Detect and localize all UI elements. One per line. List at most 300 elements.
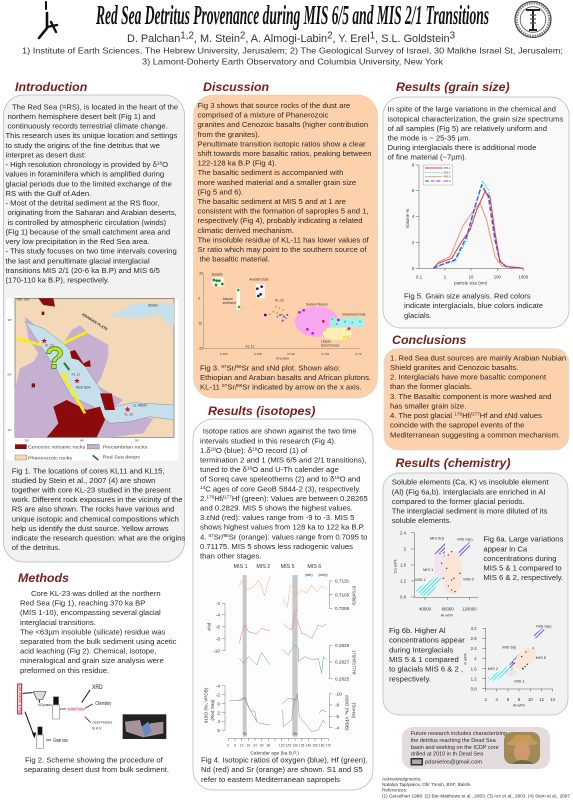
- caption: figure 1: of the detritus.: [12, 543, 60, 552]
- chart: figure 4 isotope records vs age: 0.7105: [335, 592, 350, 597]
- chart: figure 4 isotope records vs age: Calendar age (ka B.P.): [250, 750, 299, 756]
- chart: figure 3 Sr-Nd scatter plot: 0.72: [356, 352, 362, 356]
- caption: figure 6a: concentrations during: [483, 554, 557, 563]
- chart: figure 5 grain size distribution: 6: [412, 188, 415, 193]
- text: discussion body: shift towards more basaltic ratios, peaking between: [198, 149, 372, 158]
- chart: figure 5 grain size distribution: 1: [444, 274, 447, 279]
- chart: figure 6a Ca vs Al: 2: [404, 547, 407, 552]
- chart: figure 5 grain size distribution: 8: [412, 163, 415, 168]
- chart: figure 6b K vs Al: K wt%: [462, 653, 467, 665]
- map: Red Sea region geology: 10°: [7, 428, 13, 432]
- text: conclusions list: [390, 353, 566, 439]
- chart: figure 3 Sr-Nd scatter plot: 0.712: [287, 352, 295, 356]
- chart: figure 5 grain size distribution: 2: [412, 240, 415, 245]
- text: isotopes body: and 0.2829. MIS 5 shows the highest values.: [200, 504, 353, 512]
- chart: figure 4 isotope records vs age: 36: [266, 744, 270, 748]
- map legend: Cenozoic volcanic rocks: [28, 445, 86, 451]
- chart: figure 5 grain size distribution: 0: [412, 266, 415, 271]
- chart: figure 4 isotope records vs age: 135: [299, 744, 305, 748]
- chart: figure 6b K vs Al: [389, 624, 556, 707]
- text: isotopes body: 18: [334, 475, 340, 480]
- caption: figure 1: indicate the research question: what are the origins: [12, 534, 185, 542]
- map: Red Sea region geology: RED SEA: [76, 385, 91, 389]
- text: acknowledgments and references: [382, 776, 570, 799]
- authors: D. Palchan: [127, 33, 180, 45]
- text: methods body: Core KL-23 was drilled at the northern: [31, 589, 161, 598]
- text: isotopes body: 14: [200, 485, 206, 490]
- caption: figure 3: KL-11: [200, 382, 220, 392]
- map legend: Phanerozoic rocks: [28, 455, 73, 461]
- text: discussion body: 122-128 ka B.P (Fig 4).: [198, 159, 277, 168]
- chart: figure 4 isotope records vs age: 87Sr/86Sr: [352, 586, 357, 606]
- chart: figure 4 isotope records vs age: 140: [306, 744, 311, 748]
- chart: figure 6b K vs Al: 4: [495, 697, 498, 702]
- text: isotopes body: Hf (green): Values are between 0.28265: [232, 494, 368, 503]
- chart: figure 4 isotope records vs age: 30: [260, 744, 264, 748]
- text: isotopes body: 87: [209, 533, 214, 538]
- chart: figure 6a Ca vs Al: [392, 530, 564, 617]
- map: Red Sea region geology: 40°: [80, 438, 85, 442]
- text: isotopes body: tuned to the δ: [200, 465, 247, 474]
- text: discussion body: comprised of a mixture of Phanerozoic: [198, 111, 329, 120]
- text: conclusions list: 2. Interglacials have more basaltic component: [390, 372, 547, 382]
- chart: figure 6b K vs Al: 14: [550, 697, 556, 702]
- chart: figure 5 grain size distribution: particle size (nm): [454, 280, 488, 285]
- text: introduction body: (170-110 ka B.P), respectively.: [6, 276, 109, 285]
- affiliations: 1) Institute of Earth Sciences, The Hebrew University, Jerusalem; 2) The Geological Survey of Israel, 30 Malkhe Israel St, Jerusalem;: [22, 46, 563, 56]
- text: discussion body: The basaltic sediment is accompanied with: [198, 168, 343, 177]
- map legend: Precambrian rocks: [103, 445, 148, 451]
- text: isotopes body: of Soreq cave speleothems (2) and to δ: [200, 475, 334, 484]
- map legend: Red Sea deeps: [103, 455, 141, 461]
- chart legend: MIS 2: [444, 170, 451, 174]
- caption: figure 3: 87: [221, 364, 227, 369]
- caption: figure 5: [404, 292, 543, 320]
- panel: future research: [402, 727, 550, 769]
- text: isotopes body: C ages of core GeoB 5844-2 (3), respectively.: [205, 484, 361, 493]
- diagram: figure 2 procedure scheme: <63µm: [37, 703, 48, 707]
- text: isotopes body: Sr (orange): values range from 0.7095 to: [229, 532, 367, 541]
- chart: figure 3 Sr-Nd scatter plot: [198, 271, 365, 360]
- chart: figure 4 isotope records vs age: d18O (‰, VPDB): [344, 695, 349, 731]
- chart: figure 4 isotope records vs age: -10: [335, 691, 342, 696]
- text: acknowledgments and references: Acknowledgments:: [382, 776, 421, 782]
- chart: figure 6b K vs Al: Al wt%: [513, 702, 526, 707]
- text: introduction body: This research uses its unique location and settings: [6, 131, 178, 140]
- chart: figure 4 isotope records vs age: -10: [213, 648, 220, 653]
- text: methods body: separated from the bulk sediment using acetic: [20, 637, 177, 646]
- text: methods body: acid leaching (Fig 2). Chemical, isotope,: [20, 647, 156, 656]
- chart: figure 4 isotope records vs age: 130: [292, 744, 298, 748]
- text: isotopes body: 18: [252, 446, 258, 451]
- chart: figure 6a Ca vs Al: 80000: [442, 607, 454, 612]
- panel: grain size results: [383, 97, 569, 328]
- text: introduction body: (Fig 1) because of the small catchment area and: [6, 227, 170, 236]
- panel: chemistry results: [383, 473, 568, 715]
- affiliations: 3) Lamont-Doherty Earth Observatory and Columbia University, New York: [142, 57, 444, 67]
- chart: figure 6b K vs Al: 2.8: [471, 636, 477, 641]
- chart: figure 4 isotope records vs age: 2: [217, 710, 220, 715]
- chart: figure 6a Ca vs Al: Al wt%: [441, 612, 453, 617]
- chart: figure 5 grain size distribution: 100: [494, 274, 502, 279]
- panel: isotopes: [193, 419, 373, 790]
- chart: figure 6a Ca vs Al: 1.6: [400, 563, 407, 568]
- text: introduction body: RS with the Gulf of Aden.: [6, 189, 91, 198]
- map: Red Sea region geology: 500km: [148, 304, 159, 308]
- diagram: figure 2 procedure scheme: XRD: [92, 684, 103, 691]
- text: conclusions list: coincide with the sapropel events of the: [390, 421, 524, 430]
- chart: figure 3 Sr-Nd scatter plot: 0: [198, 296, 200, 300]
- text: introduction body: glacial periods due to the limited exchange of the: [6, 179, 172, 188]
- text: conclusions list: 3. The Basaltic component is more washed and: [390, 392, 551, 401]
- chart: figure 6a Ca vs Al: Ca wt%: [392, 559, 397, 573]
- text: introduction body: originating from the Saharan and Arabian deserts,: [8, 208, 177, 217]
- text: introduction body: values in foraminifera which is amplified during: [6, 170, 164, 179]
- text: grain size body: In spite of the large variations in the chemical and: [388, 105, 556, 114]
- chart: figure 3 Sr-Nd scatter plot: Sand Dunes: [321, 343, 340, 347]
- caption: figure 3: 86: [236, 364, 242, 369]
- chart: figure 4 isotope records vs age: -4: [216, 612, 220, 617]
- chart: figure 5 grain size distribution: [405, 163, 529, 285]
- chart: figure 6b K vs Al: 8: [518, 697, 521, 702]
- caption: figure 1: help us identify the dust source. Yellow arrows: [12, 524, 169, 533]
- text: discussion body: from the granites).: [198, 130, 260, 139]
- chart: figure 4 isotope records vs age: d18O (‰, VPDB): [203, 687, 208, 723]
- chart: figure 4 isotope records vs age: -4: [216, 683, 220, 688]
- chart: figure 4 isotope records vs age: 170: [326, 744, 331, 748]
- chart: figure 4 isotope records vs age: 125: [286, 744, 291, 748]
- caption: figure 1: work. Different rock exposures in the vicinity of the: [11, 495, 183, 504]
- map: Red Sea region geology: 30°: [7, 318, 13, 322]
- chart: figure 5 grain size distribution: 10: [469, 274, 474, 279]
- chart: figure 3 Sr-Nd scatter plot: KL-23: [275, 298, 284, 302]
- chart: figure 4 isotope records vs age: -2: [216, 601, 220, 606]
- chart: figure 6b K vs Al: 1.6: [471, 666, 477, 671]
- caption: figure 3: Sr/: [227, 382, 238, 392]
- chart: figure 6b K vs Al: MIS 1: [514, 679, 526, 684]
- text: introduction body: the last and penultimate glacial interglacial: [6, 256, 150, 265]
- caption: figure 5: Fig 5. Grain size analysis. Red colors: [404, 292, 531, 301]
- text: isotopes body: Isotope ratios are shown against the two time: [203, 427, 357, 436]
- text: conclusions list: has smaller grain size.: [390, 401, 466, 410]
- icon: envelope: [410, 758, 423, 766]
- chart: figure 5 grain size distribution: 4: [412, 214, 415, 219]
- map: Red Sea region geology: 30°: [25, 438, 30, 442]
- diagram: figure 2 procedure scheme: Grain size: [53, 738, 68, 744]
- text: isotopes body: Sr/: [214, 532, 224, 541]
- chart: figure 4 isotope records vs age: -6: [216, 624, 220, 629]
- photo: laboratory: [123, 714, 166, 739]
- chart: figure 5 grain size distribution: 0.1: [416, 274, 423, 279]
- caption: figure 6a: appear in Ca: [483, 544, 528, 553]
- heading: Methods: Methods: [18, 571, 69, 585]
- chart: figure 4 isotope records vs age: 160: [319, 744, 325, 748]
- heading: Introduction: Introduction: [15, 80, 88, 94]
- text: discussion body: The basaltic sediment at MIS 5 and at 1 are: [198, 197, 346, 206]
- chart: figure 4 isotope records vs age: 120: [279, 744, 285, 748]
- chart: figure 3 Sr-Nd scatter plot: 0.700: [220, 352, 228, 356]
- chart: figure 4 isotope records vs age: -4: [335, 725, 340, 730]
- caption: figure 6b: [389, 626, 465, 683]
- text: discussion body: granites and Cenozoic basalts (higher contribution: [198, 120, 368, 129]
- icon: university logo left: [39, 2, 57, 38]
- text: conclusions list: than the former glacials.: [390, 382, 472, 391]
- map: Red Sea region geology: G. ADEN: [133, 404, 147, 408]
- text: methods body: mineralogical and grain size analysis were: [20, 656, 164, 665]
- text: methods body: preformed on this residue.: [20, 666, 109, 675]
- chart: figure 4 isotope records vs age: S1: [243, 732, 247, 736]
- chart: figure 4 isotope records vs age: -2: [216, 692, 220, 697]
- chart: figure 5 grain size distribution: Volume %: [405, 209, 410, 228]
- caption: figure 6b: Fig 6b. Higher Al: [389, 626, 446, 635]
- caption: figure 6b: MIS 5 & 1 compared: [389, 655, 459, 664]
- chart: figure 4 isotope records vs age: 0.7115: [335, 579, 349, 584]
- chart: figure 6a Ca vs Al: MIS 5: [463, 576, 475, 581]
- chart: figure 6b K vs Al: 1.2: [471, 676, 477, 681]
- caption: figure 6b: respectively.: [389, 674, 431, 683]
- chart: figure 6b K vs Al: MIS 6(l): [502, 645, 517, 650]
- chart: figure 4 isotope records vs age: MIS 1: [234, 564, 248, 570]
- text: introduction body: - Most of the detrital sediment at the RS floor,: [6, 199, 159, 208]
- chart: figure 6b K vs Al: MIS 2: [488, 666, 499, 671]
- text: isotopes body: O record (1) of: [257, 446, 308, 455]
- text: grain size body: During interglacials there is additional mode: [388, 143, 536, 152]
- text: conclusions list: Mediterranean suggesting a common mechanism.: [390, 430, 560, 439]
- map legend: [15, 444, 148, 461]
- chart: figure 3 Sr-Nd scatter plot: -20: [198, 271, 203, 275]
- text: conclusions list: Shield granites and Cenozoic basalts.: [390, 363, 518, 372]
- diagram: figure 2 procedure scheme: Column Procedure: [93, 719, 112, 724]
- heading: Results (chemistry): Results (chemistry): [396, 456, 510, 470]
- text: conclusions list: Hf and εNd values: [480, 411, 542, 420]
- chart: figure 4 isotope records vs age: 6: [234, 744, 236, 748]
- caption: figure 4: Nd (red) and Sr (orange) are shown. S1 and S5: [201, 765, 363, 774]
- authors: , Y. Erel: [333, 33, 370, 45]
- text: introduction body: The Red Sea (=RS), is located in the heart of the: [12, 102, 178, 111]
- chart: figure 6a Ca vs Al: MIS 6(l): [430, 535, 445, 540]
- text: grain size body: the mode is ~ 25-35 µm.: [388, 134, 471, 142]
- text: chemistry body: The interglacial sediment is more diluted of its: [392, 506, 548, 516]
- map: Red Sea region geology: ★: [124, 405, 131, 414]
- chart: figure 5 grain size distribution: 1000: [518, 274, 529, 279]
- text: isotopes body: 18: [211, 446, 216, 451]
- chart: figure 6a Ca vs Al: 120000: [462, 607, 477, 612]
- chart: figure 4 isotope records vs age: (Red Sea): [210, 699, 215, 721]
- text: isotopes body: Hf/: [214, 494, 225, 503]
- text: isotopes body: intervals studied in this research (Fig 4).: [200, 436, 336, 445]
- text: introduction body: northern hemisphere desert belt (Fig 1) and: [8, 112, 155, 121]
- caption: figure 1: Fig 1. The locations of cores KL11 and KL15,: [12, 466, 165, 475]
- text: isotopes body: termination 2 and 1 (MIS 6/5 and 2/1 transitions),: [200, 456, 366, 464]
- text: discussion body: consistent with the formation of saproples 5 and 1,: [198, 207, 369, 216]
- caption: figure 3: Sr/: [227, 363, 237, 372]
- text: introduction body: [6, 102, 178, 285]
- caption: figure 5: indicate interglacials, blue colors indicate: [404, 301, 543, 310]
- text: introduction body: very low precipitation in the Red Sea area.: [6, 237, 150, 246]
- text: isotopes body: 18: [247, 466, 253, 471]
- text: grain size body: of all samples (Fig 5) are relatively uniform and: [388, 124, 547, 133]
- heading: Results (grain size): Results (grain size): [396, 80, 510, 94]
- authors: 2: [327, 30, 333, 42]
- caption: figure 5: glacials.: [404, 311, 432, 320]
- text: introduction body: - High resolution chronology is provided by δ: [6, 160, 157, 169]
- text: chemistry body: compared to the former glacial periods.: [392, 497, 525, 506]
- diagram: figure 2 procedure scheme: Nd, Hf, Sr: [92, 725, 102, 730]
- map: Red Sea region geology: [6, 298, 178, 461]
- chart: figure 4 isotope records vs age: 0.2827: [335, 660, 350, 665]
- text: discussion body: The insoluble residue of KL-11 has lower values of: [198, 235, 370, 244]
- caption: figure 6a: MIS 5 & 1 compared to: [483, 563, 562, 572]
- chart: figure 6b K vs Al: 3.2: [471, 626, 477, 631]
- text: isotopes body: [200, 427, 368, 560]
- text: grain size body: of fine material (~7µm).: [388, 153, 467, 162]
- diagram: figure 2 procedure scheme: Chemistry: [95, 701, 111, 707]
- text: isotopes body: O (blue): δ: [216, 446, 252, 455]
- caption: figure 4: Fig 4. Isotopic ratios of oxygen (blue), Hf (green),: [201, 756, 368, 764]
- chart: figure 4 isotope records vs age: 18: [246, 744, 250, 748]
- heading: Results (isotopes): Results (isotopes): [208, 404, 315, 418]
- chart: figure 4 isotope records vs age: S5: [293, 732, 297, 736]
- chart: figure 4 isotope records vs age: (early): [318, 573, 328, 577]
- diagram: figure 2 procedure scheme: Bulk sediment: [18, 685, 22, 713]
- authors: 2: [240, 30, 245, 42]
- text: discussion body: the basaltic material.: [200, 255, 270, 264]
- icon: university seal right: [515, 2, 551, 38]
- chart: figure 3 Sr-Nd scatter plot: Aswan: [223, 297, 233, 301]
- chart: figure 3 Sr-Nd scatter plot: Greenland Dust: [342, 313, 365, 317]
- chart: figure 6b K vs Al: 0.8: [471, 686, 477, 691]
- diagram: figure 2 procedure scheme: Insoluble Residue: [67, 707, 85, 712]
- caption: figure 1: unique isotopic and chemical compositions which: [12, 514, 179, 523]
- chart: figure 4 isotope records vs age: 0: [227, 744, 229, 748]
- affiliations: [22, 46, 563, 67]
- caption: figure 3: 87: [222, 383, 228, 388]
- caption: figure 6a: [483, 535, 564, 582]
- chart: figure 4 isotope records vs age: 176Hf/177Hf: [352, 650, 357, 675]
- caption: figure 3: [200, 363, 371, 392]
- map: Red Sea region geology: KL 15: [124, 413, 133, 417]
- caption: figure 6b: to glacials MIS 6 & 2 ,: [389, 665, 463, 674]
- caption: figure 2: separating desert dust from bulk sediment.: [24, 765, 169, 774]
- caption: figure 1: studied by Stein et al., 2007 (4) are shown: [12, 476, 155, 485]
- chart: figure 4 isotope records vs age: 4: [217, 719, 220, 724]
- map: Red Sea region geology: 20°: [7, 373, 13, 377]
- chart: figure 4 isotope records vs age: 0.2825: [335, 676, 350, 681]
- chart: figure 4 isotope records vs age: 0: [217, 701, 220, 706]
- chart: figure 6b K vs Al: 10: [528, 697, 533, 702]
- text: discussion body: (Fig 5 and 6).: [198, 187, 243, 196]
- text: introduction body: transitions MIS 2/1 (20-6 ka B.P) and MIS 6/5: [6, 266, 160, 275]
- chart: figure 3 Sr-Nd scatter plot: Basalts: [212, 272, 223, 276]
- chart: figure 4 isotope records vs age: 6: [217, 728, 220, 733]
- chart: figure 6a Ca vs Al: 1.2: [400, 579, 407, 584]
- text: future research: basin and working on the ICDP core: [411, 745, 499, 751]
- text: isotopes body: than other stages.: [200, 552, 261, 560]
- text: isotopes body: O and U-Th calender age: [252, 465, 339, 474]
- text: conclusions list: 1. Red Sea dust sources are mainly Arabian Nubian: [390, 353, 566, 362]
- heading: Conclusions: Conclusions: [392, 333, 466, 347]
- chart: figure 3 Sr-Nd scatter plot: 0.708: [254, 352, 262, 356]
- chart: figure 4 isotope records vs age: -6: [335, 714, 340, 719]
- chart legend: MIS 1: [444, 166, 451, 170]
- text: discussion body: Penultimate transition isotopic ratios show a clear: [198, 139, 366, 148]
- text: isotopes body: 3.εNd (red): values range from -9 to -3. MIS 5: [200, 513, 354, 522]
- chart: figure 4 isotope records vs age: (late): [305, 573, 313, 577]
- map: Red Sea region geology: KL 11: [72, 373, 80, 377]
- text: isotopes body: shows highest values from 128 ka to 122 ka B.P.: [200, 523, 365, 532]
- chart: figure 3 Sr-Nd scatter plot: Libyan: [321, 340, 331, 344]
- diagram: figure 2 procedure scheme: [18, 684, 166, 748]
- chart: figure 6b K vs Al: 6: [507, 697, 510, 702]
- map: Red Sea region geology: KL 23: [45, 344, 54, 348]
- text: discussion body: Sr ratio which may point to the southern source of: [198, 245, 367, 254]
- chart: figure 4 isotope records vs age: 12: [240, 744, 244, 748]
- text: future research: Future research includes characterizing: [411, 731, 507, 737]
- text: methods body: (MIS 1-10), encompassing several glacial: [20, 608, 161, 617]
- chart: figure 3 Sr-Nd scatter plot: Arandis Dust: [249, 278, 268, 282]
- heading: Discussion: Discussion: [203, 80, 270, 94]
- text: isotopes body: 176: [206, 494, 215, 499]
- authors: , A. Almogi-Labin: [245, 33, 327, 45]
- text: isotopes body: 86: [224, 533, 229, 538]
- caption: figure 3: 86: [237, 383, 243, 388]
- chart: figure 6a Ca vs Al: MIS 2: [415, 577, 427, 582]
- text: discussion body: climatic derived mechanism.: [198, 226, 294, 235]
- text: isotopes body: 4.: [200, 532, 206, 541]
- caption: figure 1: together with core KL-23 studied in the present: [12, 486, 172, 494]
- caption: figure 3: Fig 3.: [200, 363, 219, 372]
- chart: figure 4 isotope records vs age: 24: [253, 744, 257, 748]
- chart: figure 4 isotope records vs age: MIS 2: [256, 564, 270, 570]
- authors: 1,2: [180, 30, 194, 42]
- text: methods body: [20, 589, 177, 675]
- text: grain size body: [388, 105, 563, 162]
- map: Red Sea region geology: 50°: [135, 438, 140, 442]
- photo: researcher portrait: [504, 732, 540, 764]
- caption: figure 1: RS are also shown. The rocks have various and: [12, 505, 174, 514]
- chart: figure 3 Sr-Nd scatter plot: Sudan Plutons: [306, 302, 328, 306]
- chart: figure 4 isotope records vs age: MIS 5: [281, 564, 295, 570]
- map: Red Sea region geology: ★: [73, 376, 80, 385]
- chart: figure 3 Sr-Nd scatter plot: KL-11: [246, 344, 254, 348]
- chart: figure 6a Ca vs Al: 2.4: [400, 530, 407, 535]
- chart: figure 6a Ca vs Al: MIS 6(e): [457, 537, 473, 542]
- caption: figure 1: [11, 466, 185, 552]
- chart: figure 3 Sr-Nd scatter plot: -20: [198, 346, 203, 350]
- chart legend: MIS 6: [444, 179, 451, 183]
- caption: figure 4: [201, 756, 368, 784]
- chart: figure 6a Ca vs Al: 0.8: [400, 595, 407, 600]
- text: future research: drilled at 2010 in th Dead Sea: [411, 752, 484, 758]
- chart: figure 4 isotope records vs age: 0.2829: [335, 643, 350, 648]
- caption: figure 6b: during Interglacials: [389, 645, 453, 654]
- chart: figure 6a Ca vs Al: MIS 1: [423, 567, 434, 572]
- text: chemistry body: (Al) (Fig 6a,b). Interglacials are enriched in Al: [392, 487, 546, 496]
- text: grain size body: isotopical characterization, the grain size spectrums: [388, 114, 563, 123]
- text: isotopes body: 2.: [200, 494, 206, 503]
- map: Red Sea region geology: MED. SEA: [17, 298, 30, 302]
- text: conclusions list: Hf/: [462, 411, 473, 420]
- authors: , M. Stein: [194, 33, 240, 45]
- text: introduction body: is controlled by atmospheric circulation (winds): [8, 218, 167, 227]
- chart: figure 4 isotope records vs age: -8: [335, 703, 340, 708]
- text: acknowledgments and references: References:: [382, 788, 407, 793]
- chart: figure 6b K vs Al: MIS 6(e): [536, 624, 552, 629]
- chart legend: MIS 5: [444, 175, 451, 179]
- caption: figure 4: refer to eastern Mediterranean sapropels: [201, 775, 340, 784]
- text: introduction body: 18: [157, 161, 163, 166]
- text: conclusions list: 177: [472, 412, 480, 416]
